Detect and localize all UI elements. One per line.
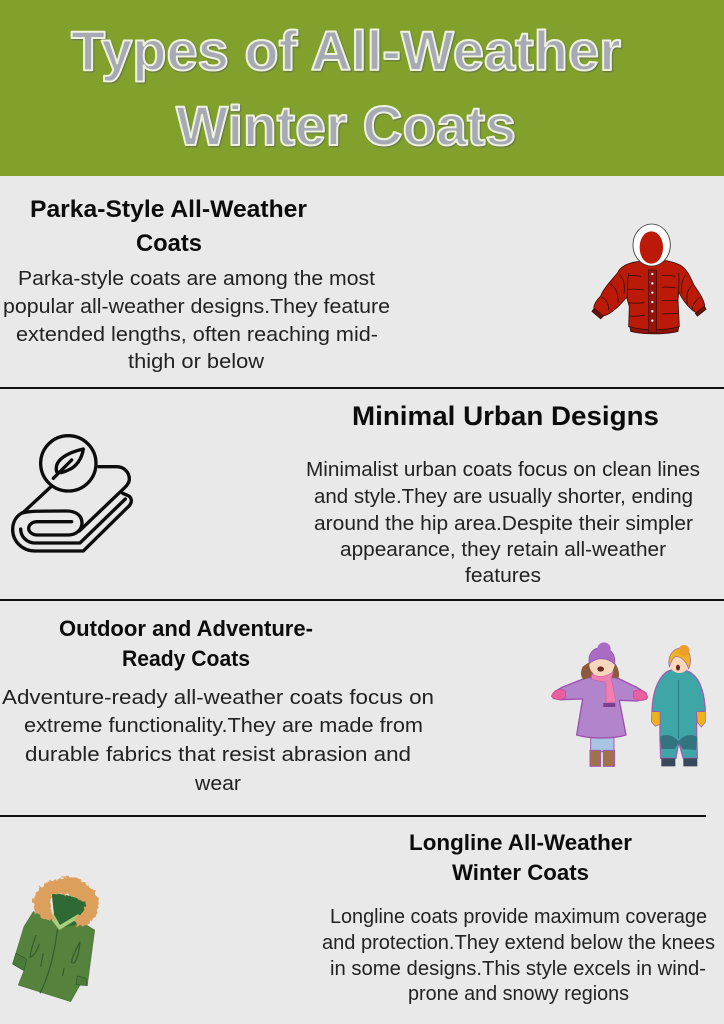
text: minimal urban description: around the hip area.Despite their simpler	[314, 513, 693, 535]
text: parka-style description: popular all-weather designs.They feature	[3, 296, 390, 318]
heading: parka-style: Coats	[136, 230, 202, 257]
heading: parka-style: Parka-Style All-Weather	[30, 196, 307, 223]
heading: outdoor and adventure: Outdoor and Adventure-	[59, 616, 313, 641]
child in teal snowsuit	[651, 645, 705, 766]
text: minimal urban description	[306, 459, 700, 587]
panel: minimal urban designs	[13, 401, 700, 587]
heading: longline	[409, 830, 632, 885]
text: outdoor description: Adventure-ready all-weather coats focus on	[2, 687, 434, 709]
text: longline description: in some designs.This style excels in wind-	[330, 958, 706, 980]
child in purple coat	[551, 642, 648, 766]
heading: outdoor and adventure: Ready Coats	[122, 646, 250, 671]
heading: parka-style	[30, 196, 307, 257]
icon: red puffer jacket	[592, 224, 706, 334]
icon: two children in winter coats	[551, 642, 705, 766]
title banner	[0, 0, 724, 176]
text: outdoor description	[2, 687, 434, 795]
text: parka-style description: extended lengths, often reaching mid-	[16, 324, 378, 346]
title: Winter Coats	[176, 94, 516, 157]
text: minimal urban description: features	[465, 565, 541, 587]
heading: outdoor and adventure	[59, 616, 313, 671]
text: minimal urban description: and style.They are usually shorter, ending	[314, 486, 693, 508]
text: longline description	[322, 906, 715, 1005]
icon: green longline parka	[13, 877, 99, 1002]
panel: outdoor and adventure-ready coats	[2, 616, 705, 795]
panel: parka-style coats	[3, 196, 706, 373]
text: outdoor description: wear	[194, 773, 241, 795]
text: parka-style description: thigh or below	[128, 351, 265, 373]
text: outdoor description: extreme functionality.They are made from	[24, 715, 423, 737]
text: outdoor description: durable fabrics that resist abrasion and	[25, 744, 411, 766]
text: longline description: Longline coats provide maximum coverage	[330, 906, 707, 928]
heading: minimal urban: Minimal Urban Designs	[352, 401, 659, 431]
heading: longline: Longline All-Weather	[409, 830, 632, 855]
text: parka-style description	[3, 268, 390, 373]
text: minimal urban description: Minimalist urban coats focus on clean lines	[306, 459, 700, 481]
text: longline description: and protection.They extend below the knees	[322, 932, 715, 954]
heading: longline: Winter Coats	[452, 860, 589, 885]
text: minimal urban description: appearance, they retain all-weather	[340, 539, 666, 561]
text: longline description: prone and snowy regions	[408, 983, 629, 1005]
icon: folded blanket with leaf	[13, 436, 131, 551]
panel: longline coats	[13, 830, 715, 1005]
title: Types of All-Weather	[71, 19, 621, 82]
title	[71, 19, 621, 157]
text: parka-style description: Parka-style coats are among the most	[18, 268, 375, 290]
